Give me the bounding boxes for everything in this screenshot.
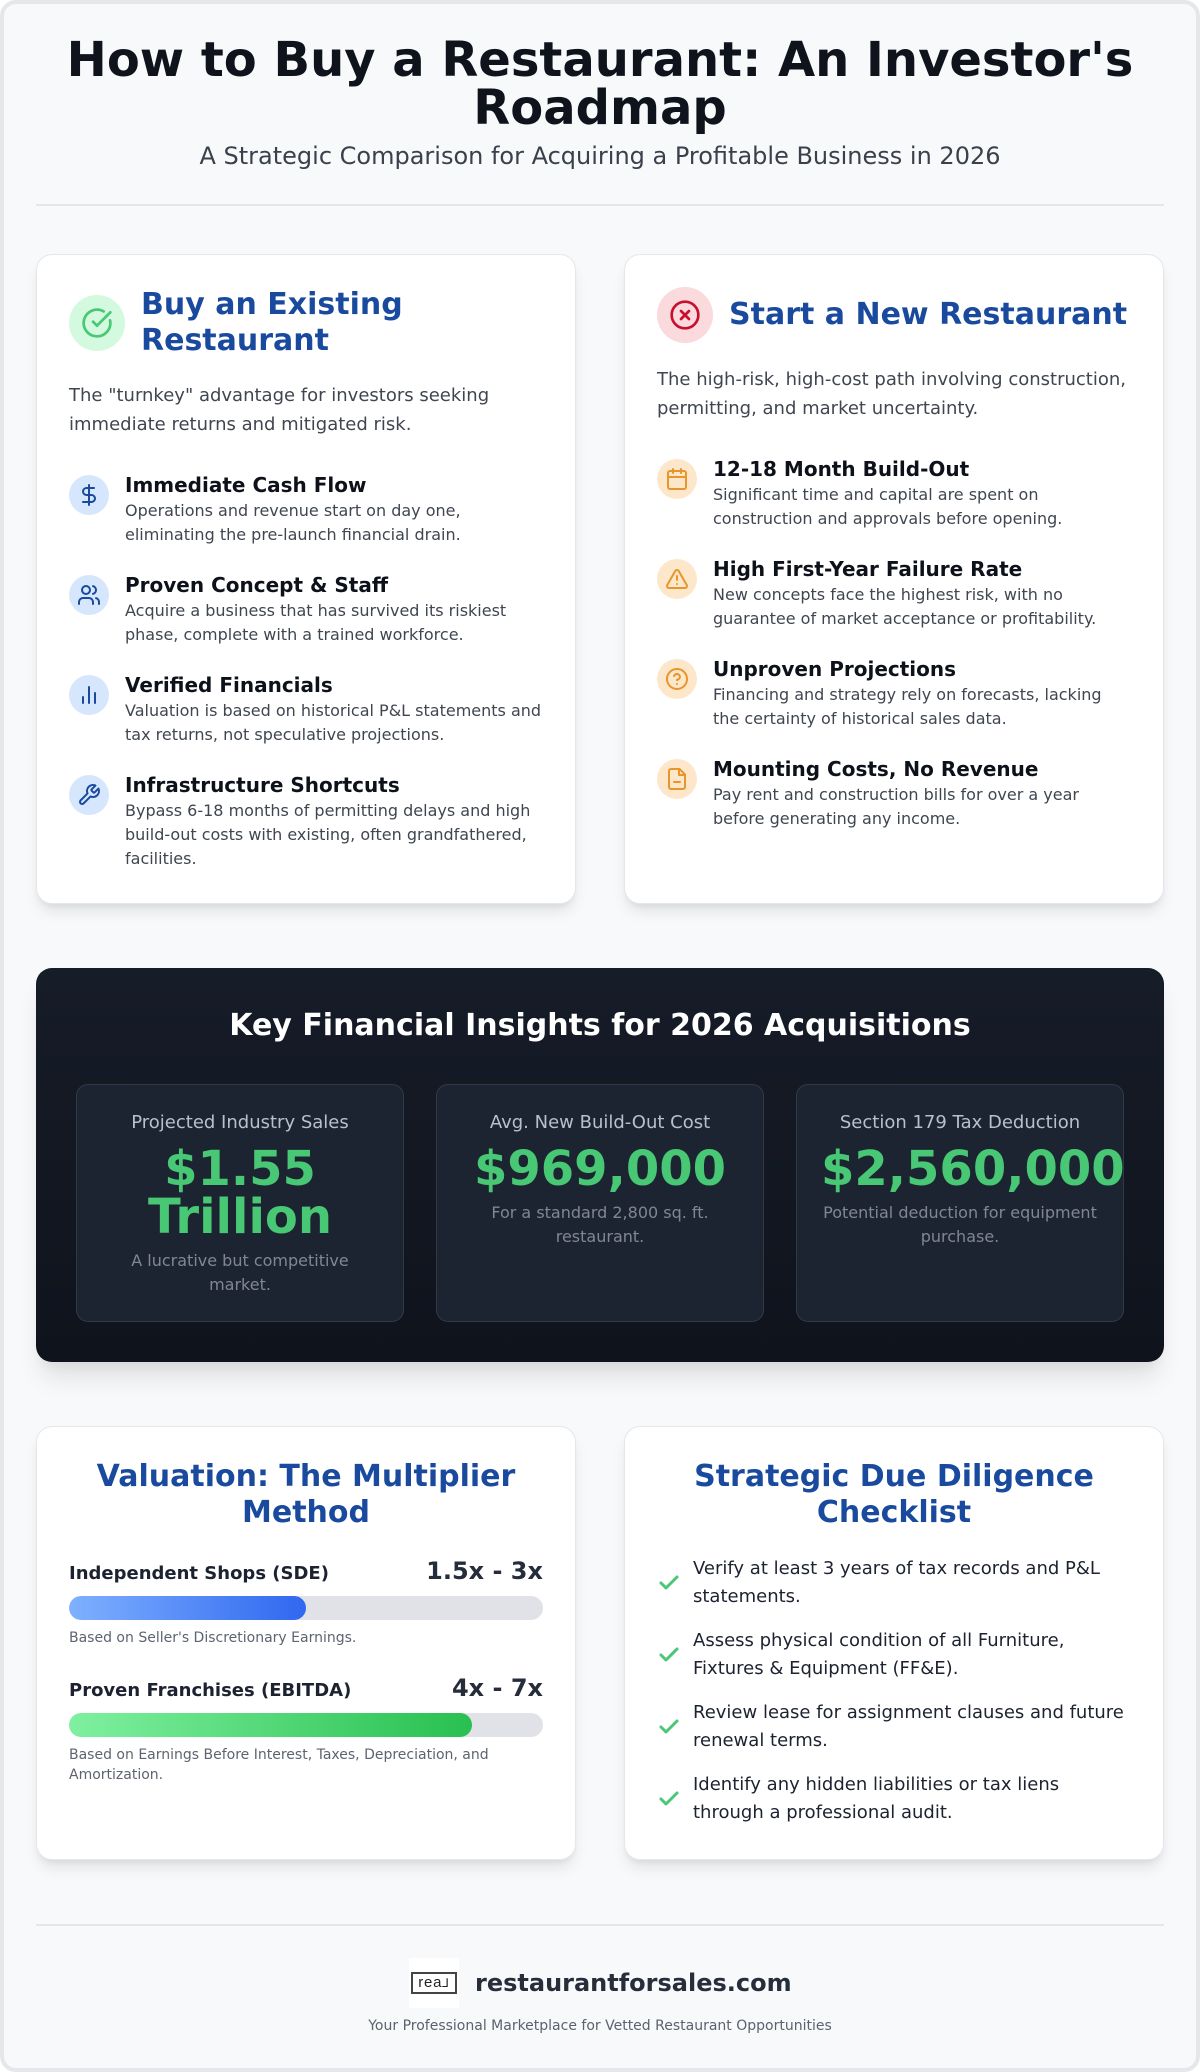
stat: build-out cost xyxy=(436,1084,764,1322)
intro text: turnkey advantage: The "turnkey" advantage for investors seeking immediate returns and mitigated risk. xyxy=(69,385,489,435)
footer brand name: restaurantforsales.com xyxy=(475,1969,792,1997)
footer tagline: Your Professional Marketplace for Vetted Restaurant Opportunities xyxy=(368,2018,832,2034)
footer logo xyxy=(409,1958,459,2008)
stat: section 179 deduction: $2,560,000 xyxy=(821,1141,1125,1197)
item: infrastructure shortcuts: Bypass 6-18 months of permitting delays and high build-out costs with existing, often grandfathered, facilities. xyxy=(125,801,530,868)
icon: file minus xyxy=(657,759,697,799)
panel heading: financial insights: Key Financial Insights for 2026 Acquisitions xyxy=(229,1008,971,1043)
icon: users xyxy=(69,575,109,615)
stat: section 179 deduction: Section 179 Tax Deduction xyxy=(840,1112,1080,1133)
icon: dollar xyxy=(69,475,109,515)
panel heading: start new xyxy=(657,287,1127,343)
metric: proven franchises xyxy=(69,1674,543,1783)
checklist item: FF&E: Assess physical condition of all Furniture, Fixtures & Equipment (FF&E). xyxy=(693,1630,1064,1679)
metric: proven franchises: 4x - 7x xyxy=(452,1674,543,1702)
panel: buy an existing restaurant xyxy=(36,254,576,904)
checklist item: liabilities: Identify any hidden liabilities or tax liens through a professional audit. xyxy=(693,1774,1059,1823)
item: build-out time: 12-18 Month Build-Out xyxy=(713,457,969,481)
panel heading: checklist: Strategic Due Diligence Checklist xyxy=(694,1459,1094,1530)
item: verified financials: Valuation is based on historical P&L statements and tax returns, not speculative projections. xyxy=(125,701,541,744)
stat: projected industry sales xyxy=(76,1084,404,1322)
item: proven concept and staff: Proven Concept & Staff xyxy=(125,573,388,597)
stat: build-out cost: For a standard 2,800 sq. ft. restaurant. xyxy=(491,1203,709,1246)
panel: key financial insights xyxy=(36,968,1164,1362)
item: build-out time xyxy=(657,457,1062,528)
icon: wrench xyxy=(69,775,109,815)
item: proven concept and staff: Acquire a business that has survived its riskiest phase, complete with a trained workforce. xyxy=(125,601,506,644)
panel: due diligence checklist xyxy=(624,1426,1164,1860)
panel: valuation multiplier method xyxy=(36,1426,576,1860)
metric: independent shops: Independent Shops (SDE) xyxy=(69,1563,329,1584)
metric: proven franchises: Proven Franchises (EBITDA) xyxy=(69,1680,351,1701)
stat: build-out cost: $969,000 xyxy=(474,1141,726,1197)
item: mounting costs: Pay rent and construction bills for over a year before generating any income. xyxy=(713,785,1079,828)
stat: projected industry sales: A lucrative but competitive market. xyxy=(131,1251,349,1294)
item: failure rate xyxy=(657,557,1096,628)
panel heading: buy existing: Buy an Existing Restaurant xyxy=(141,287,403,358)
item: build-out time: Significant time and capital are spent on construction and approvals before opening. xyxy=(713,485,1062,528)
checklist item: lease: Review lease for assignment clauses and future renewal terms. xyxy=(693,1702,1124,1751)
metric: independent shops xyxy=(69,1557,543,1646)
stat: section 179 deduction: Potential deduction for equipment purchase. xyxy=(823,1203,1097,1246)
bar chart: 50 percent fill xyxy=(69,1596,543,1620)
item: verified financials xyxy=(69,673,541,744)
item: mounting costs xyxy=(657,757,1079,828)
item: failure rate: New concepts face the highest risk, with no guarantee of market acceptance or profitability. xyxy=(713,585,1096,628)
item: unproven projections: Financing and strategy rely on forecasts, lacking the certainty of historical sales data. xyxy=(713,685,1102,728)
item: proven concept and staff xyxy=(69,573,506,644)
stat: build-out cost: Avg. New Build-Out Cost xyxy=(490,1112,710,1133)
item: failure rate: High First-Year Failure Rate xyxy=(713,557,1022,581)
icon: question circle xyxy=(657,659,697,699)
item: mounting costs: Mounting Costs, No Revenue xyxy=(713,757,1038,781)
footer logo: rea⅃ xyxy=(418,1974,450,1991)
item: unproven projections xyxy=(657,657,1102,728)
metric: independent shops: 1.5x - 3x xyxy=(426,1557,543,1585)
item: immediate cash flow: Operations and revenue start on day one, eliminating the pre-launch financial drain. xyxy=(125,501,461,544)
icon: bar chart xyxy=(69,675,109,715)
stat: projected industry sales: $1.55 Trillion xyxy=(148,1141,332,1245)
icon: green check circle xyxy=(69,295,125,351)
stat: projected industry sales: Projected Industry Sales xyxy=(131,1112,349,1133)
item: immediate cash flow xyxy=(69,473,461,544)
metric: proven franchises: Based on Earnings Before Interest, Taxes, Depreciation, and Amortization. xyxy=(69,1747,489,1783)
bar chart: 85 percent fill xyxy=(69,1713,543,1737)
stat: section 179 deduction xyxy=(796,1084,1124,1322)
item: unproven projections: Unproven Projections xyxy=(713,657,956,681)
item: verified financials: Verified Financials xyxy=(125,673,333,697)
panel: start a new restaurant xyxy=(624,254,1164,904)
title: How to Buy a Restaurant: An Investor's Roadmap xyxy=(67,32,1133,136)
subtitle: A Strategic Comparison for Acquiring a Profitable Business in 2026 xyxy=(199,142,1001,170)
panel heading: start new: Start a New Restaurant xyxy=(729,297,1127,332)
icon: warning triangle xyxy=(657,559,697,599)
panel heading: valuation: Valuation: The Multiplier Method xyxy=(97,1459,515,1530)
intro text: high risk path: The high-risk, high-cost path involving construction, permitting, and market uncertainty. xyxy=(657,369,1126,419)
icon: red x circle xyxy=(657,287,713,343)
icon: calendar xyxy=(657,459,697,499)
item: infrastructure shortcuts: Infrastructure Shortcuts xyxy=(125,773,400,797)
item: immediate cash flow: Immediate Cash Flow xyxy=(125,473,366,497)
item: infrastructure shortcuts xyxy=(69,773,530,868)
metric: independent shops: Based on Seller's Discretionary Earnings. xyxy=(69,1630,356,1646)
checklist item: tax records: Verify at least 3 years of tax records and P&L statements. xyxy=(693,1558,1100,1607)
